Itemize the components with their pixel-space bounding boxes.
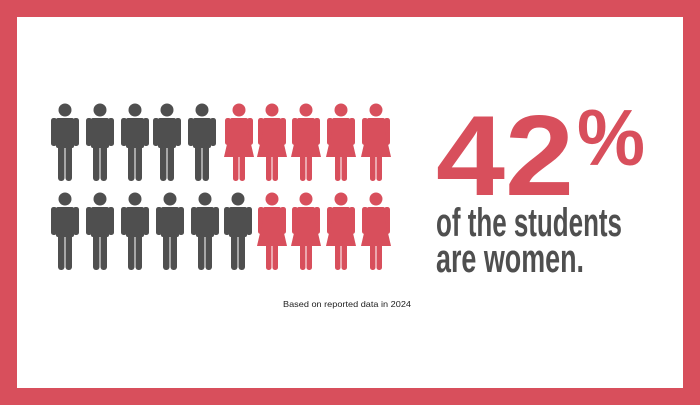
headline: 42%: % — [577, 93, 645, 182]
footnote: Based on reported data in 2024 — [283, 299, 411, 309]
headline: 42%: 42 — [436, 93, 574, 220]
text block: subtitle: are women. — [436, 237, 584, 281]
chart: people pictogram — [51, 104, 391, 270]
row 1 women — [224, 104, 391, 181]
row 2 women — [257, 192, 391, 270]
row 1 men — [51, 104, 216, 181]
headline: 42% — [436, 93, 645, 220]
text block: subtitle — [436, 201, 622, 281]
row 2 men — [51, 192, 252, 270]
